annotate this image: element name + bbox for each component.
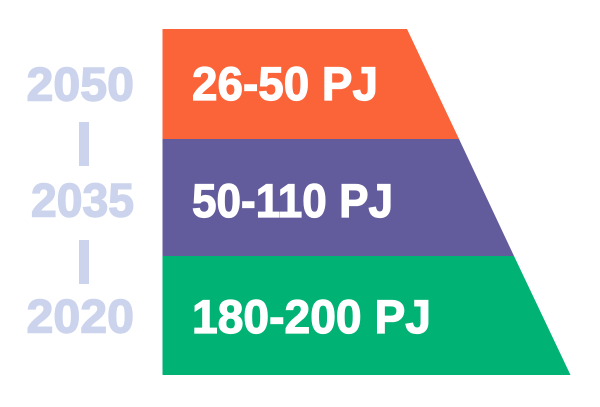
purple tier shape	[162, 139, 514, 256]
timeline connector 2050 to 2035	[79, 122, 89, 166]
timeline of years	[26, 58, 134, 342]
value 180-200 PJ: 180-200 PJ	[192, 290, 431, 343]
tier: 2035	[162, 139, 514, 256]
green tier shape	[162, 256, 570, 375]
tier: 2050	[162, 29, 459, 139]
year 2035: 2035	[31, 174, 134, 226]
timeline connector 2035 to 2020	[79, 240, 89, 284]
year 2020: 2020	[26, 290, 134, 342]
orange tier shape	[162, 29, 459, 139]
value 26-50 PJ: 26-50 PJ	[192, 57, 378, 110]
pyramid	[162, 29, 570, 375]
year 2050: 2050	[26, 58, 134, 110]
tier: 2020	[162, 256, 570, 375]
value 50-110 PJ: 50-110 PJ	[192, 174, 393, 227]
